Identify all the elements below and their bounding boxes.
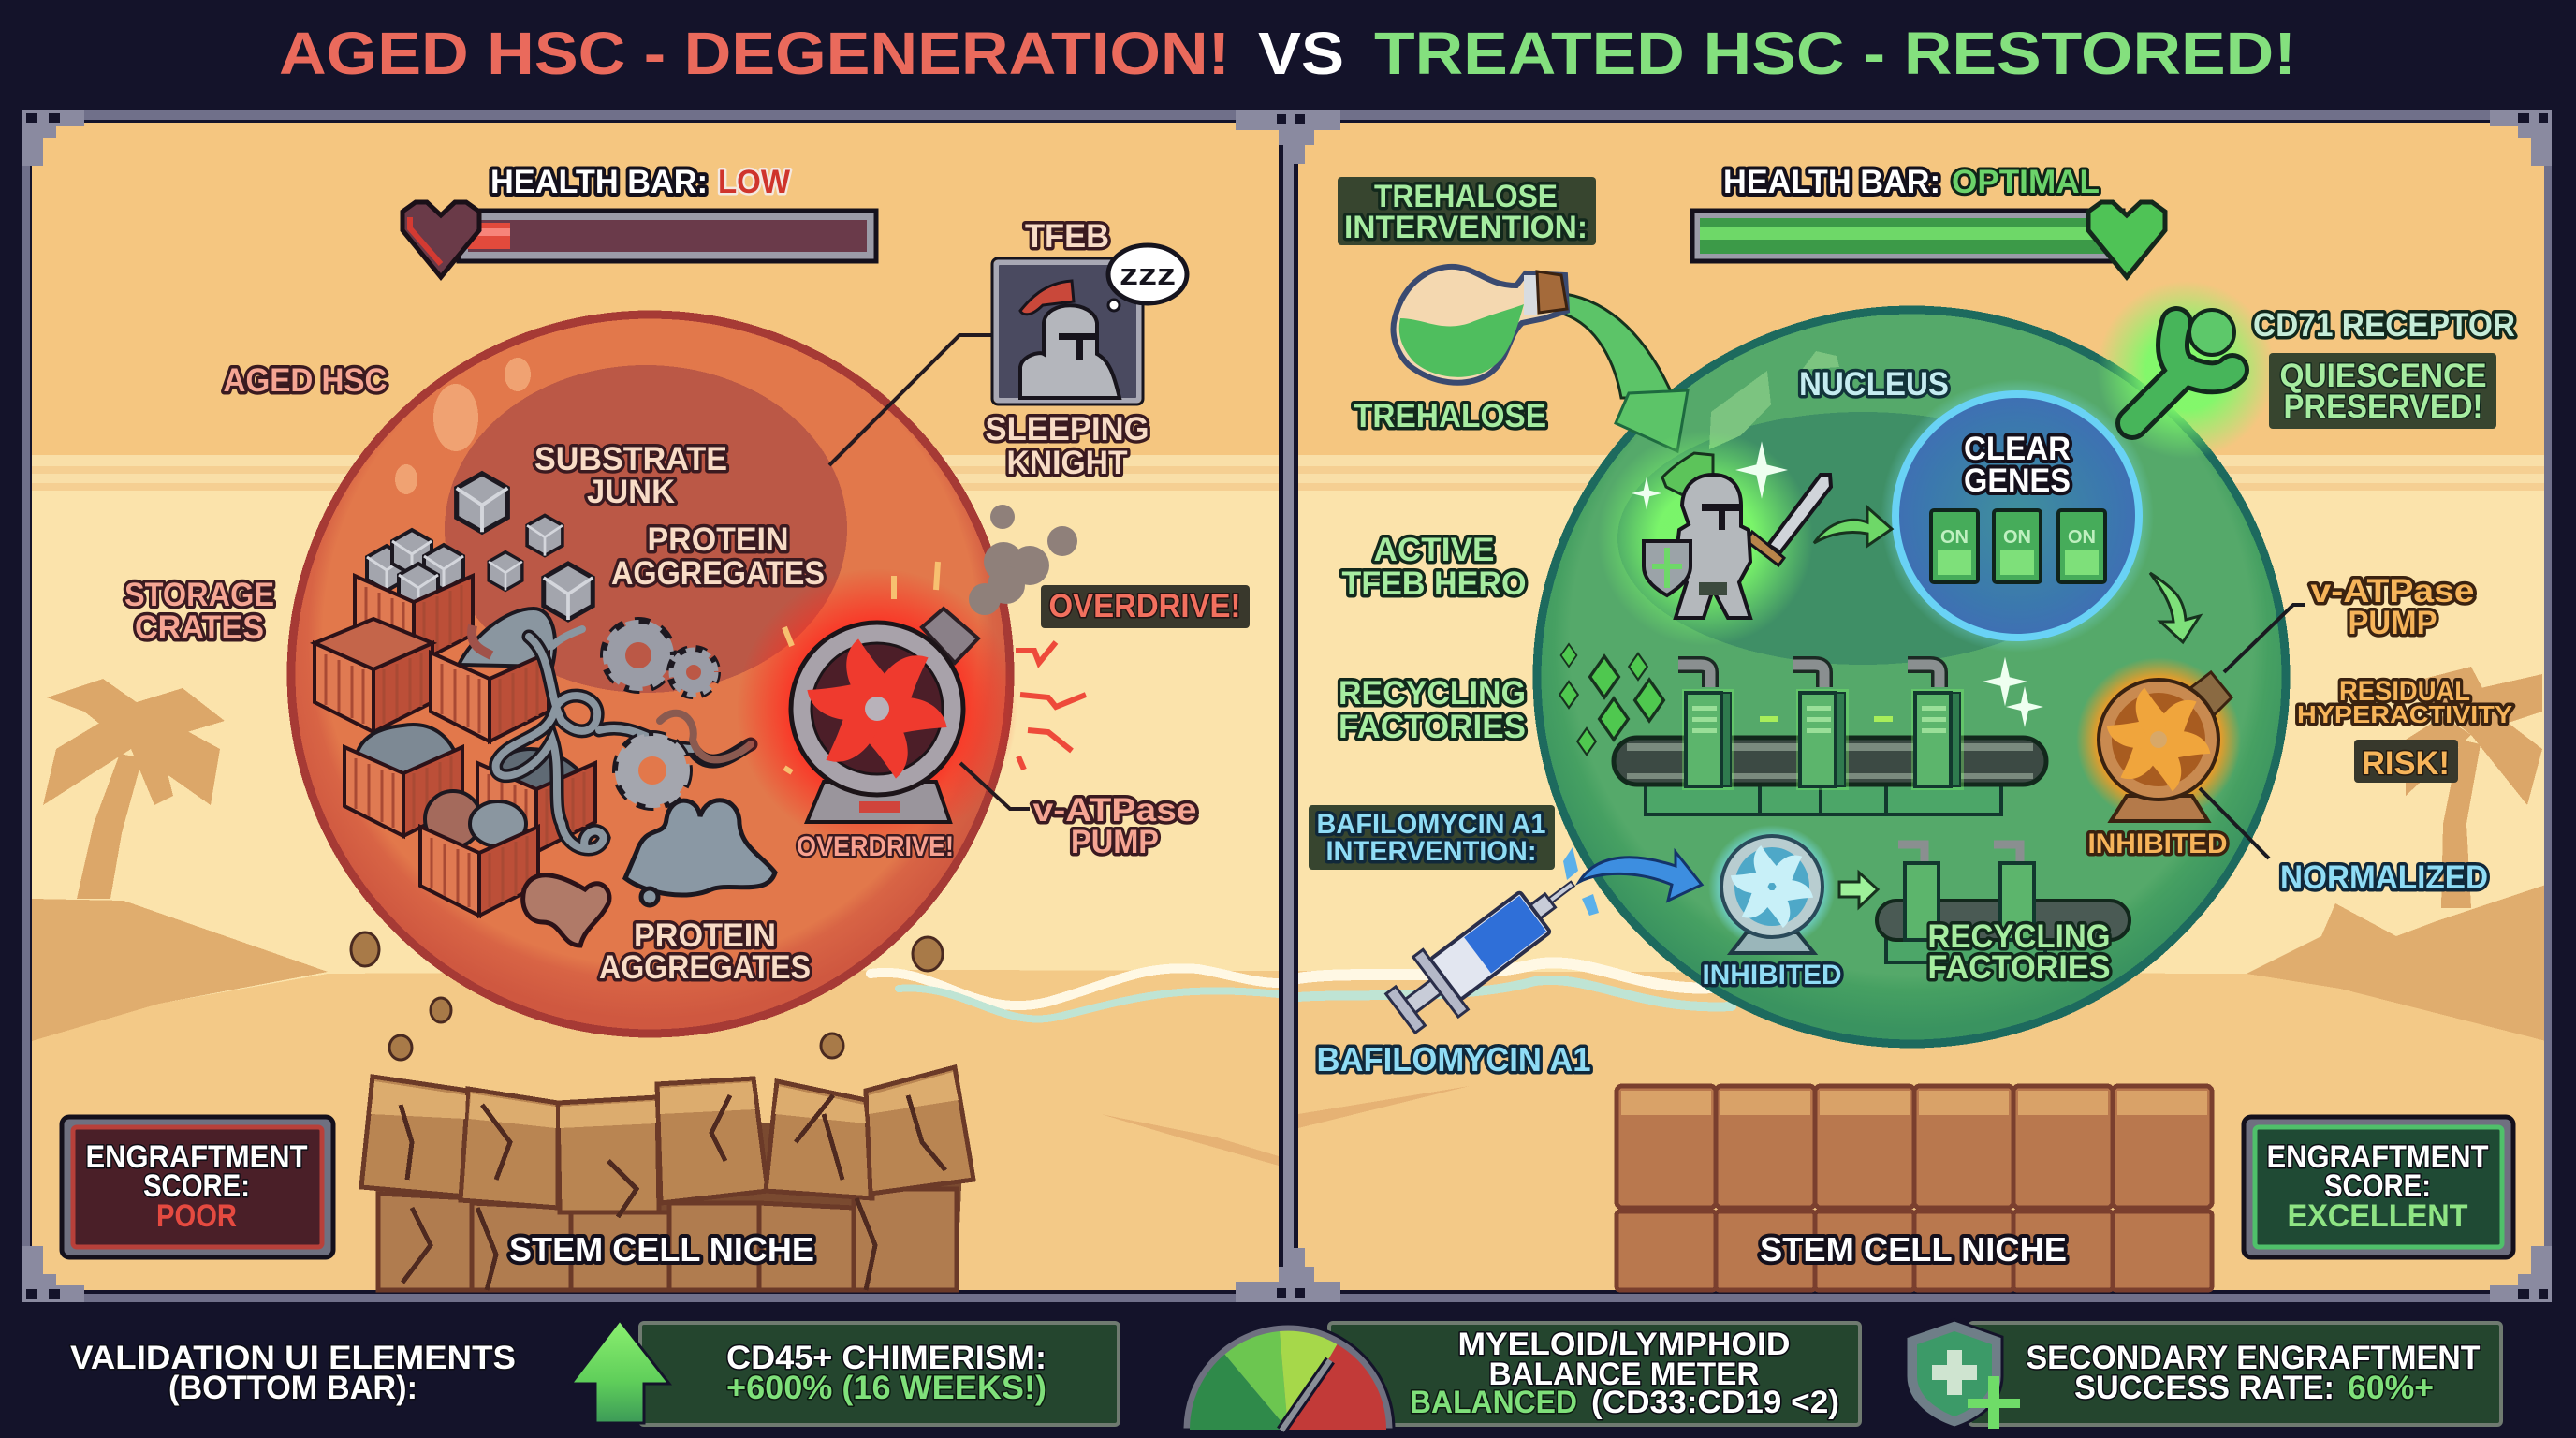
falling debris [351, 932, 943, 1060]
engraftment score poor: POOR [156, 1198, 237, 1234]
on switch 3 [2058, 510, 2105, 582]
recycling factories inner label: FACTORIES [1928, 949, 2110, 986]
trehalose intervention box [1338, 177, 1596, 245]
stem cell niche label: STEM CELL NICHE [509, 1230, 814, 1269]
aged cell body [291, 315, 1010, 1034]
title: VS [1258, 20, 1344, 87]
active TFEB label: ACTIVE [1374, 532, 1494, 568]
gray protein aggregate blob [625, 800, 775, 905]
trehalose intervention box: INTERVENTION: [1344, 210, 1588, 245]
risk callout: RISK! [2362, 745, 2450, 782]
v-ATPase pump inhibited orange [2076, 657, 2241, 822]
blue inhibited pump [1708, 825, 1836, 953]
shield icon [1906, 1320, 2020, 1429]
active TFEB hero knight [1598, 431, 1831, 646]
tangled protein strands [496, 629, 751, 849]
health bar low: HEALTH BAR: [490, 164, 708, 200]
residual hyperactivity label: RESIDUAL [2339, 676, 2470, 707]
health bar low [402, 164, 876, 277]
small arrow to factory [1839, 873, 1878, 907]
balance meter panel: BALANCE METER [1488, 1357, 1760, 1392]
restored cell body [1537, 310, 2286, 1044]
trehalose intervention box: TREHALOSE [1374, 179, 1558, 214]
large recycling factory conveyor [1614, 665, 2046, 814]
blue inhibited label: INHIBITED [1702, 960, 1842, 990]
nucleus with gene switches: GENES [1964, 462, 2071, 499]
sleeping knight card: TFEB [1025, 218, 1109, 255]
secondary engraftment panel: SUCCESS RATE: [2074, 1370, 2334, 1406]
palm tree left [43, 679, 225, 899]
v-ATPase pump overdrive [737, 568, 1017, 849]
pump status label: OVERDRIVE! [797, 831, 954, 862]
nucleus with gene switches: CLEAR [1964, 431, 2071, 467]
health bar optimal: HEALTH BAR: [1723, 164, 1940, 200]
on switch 3: ON [2068, 527, 2096, 548]
sleeping knight card: zzz [1120, 257, 1176, 291]
protein aggregates label upper: PROTEIN [648, 521, 788, 558]
on switch 2: ON [2003, 527, 2031, 548]
pump leader line and label [960, 763, 1196, 860]
bafilomycin label: BAFILOMYCIN A1 [1316, 1040, 1591, 1078]
gears [608, 625, 714, 802]
panel: treated HSC [1309, 164, 2515, 1290]
engraftment score poor [62, 1117, 333, 1257]
sleeping knight card: KNIGHT [1007, 445, 1127, 481]
quiescence preserved callout [2269, 353, 2496, 429]
recycling factories inner label: RECYCLING [1928, 918, 2110, 955]
recycling factories label: FACTORIES [1339, 709, 1526, 745]
nucleus label: NUCLEUS [1799, 366, 1949, 403]
secondary engraftment panel: SECONDARY ENGRAFTMENT [2026, 1340, 2481, 1376]
nucleus with gene switches [1881, 379, 2154, 653]
balance meter panel: MYELOID/LYMPHOID [1458, 1327, 1790, 1362]
pump leader line and label: PUMP [1071, 824, 1159, 860]
bottom validation bar [70, 1320, 2501, 1431]
recycling factories label: RECYCLING [1339, 675, 1526, 712]
sleeping knight card [829, 218, 1187, 481]
residual hyperactivity label: HYPERACTIVITY [2297, 700, 2512, 728]
v-ATPase label right: PUMP [2348, 605, 2437, 641]
normalized label: NORMALIZED [2280, 859, 2488, 896]
storage crates label: CRATES [135, 609, 264, 646]
on switch 1 [1931, 510, 1978, 582]
gray substrate cubes [457, 474, 593, 620]
engraftment score poor: ENGRAFTMENT [86, 1139, 308, 1175]
active TFEB label [1342, 532, 1526, 602]
on switch 1: ON [1940, 527, 1969, 548]
recycling factories label [1339, 675, 1526, 745]
CD71 receptor: CD71 RECEPTOR [2253, 307, 2515, 344]
secondary engraftment panel [1906, 1320, 2501, 1429]
small recycling factory [1877, 844, 2130, 962]
bafilomycin intervention box [1309, 805, 1555, 870]
substrate junk label: JUNK [587, 474, 675, 510]
pump sparks [784, 562, 1086, 772]
cracked stem cell niche [361, 1067, 973, 1290]
blue arrow [1579, 852, 1702, 901]
recycling factories inner label [1928, 918, 2110, 986]
quiescence preserved callout: PRESERVED! [2284, 389, 2482, 425]
substrate junk label: SUBSTRATE [534, 441, 727, 477]
normalized label [2200, 788, 2488, 896]
balance meter panel: BALANCED [1410, 1385, 1577, 1420]
arrow nucleus to pump [2150, 573, 2200, 642]
health bar optimal [1692, 164, 2165, 277]
storage crates label [124, 577, 274, 646]
chimerism panel: CD45+ CHIMERISM: [726, 1340, 1046, 1376]
balance meter panel: (CD33:CD19 <2) [1591, 1385, 1839, 1420]
palm tree right [2406, 667, 2542, 908]
bafilomycin intervention box: BAFILOMYCIN A1 [1316, 809, 1546, 840]
secondary engraftment panel: 60%+ [2348, 1370, 2434, 1406]
stem cell niche label right: STEM CELL NICHE [1760, 1230, 2067, 1269]
pump smoke [969, 505, 1077, 615]
residual hyperactivity label [2297, 676, 2512, 728]
medicine drops [1563, 847, 1599, 916]
chimerism panel [571, 1320, 1119, 1425]
validation heading [70, 1340, 516, 1406]
v-ATPase label right [2224, 573, 2475, 672]
arrow hero to nucleus [1814, 507, 1892, 546]
chimerism panel: +600% (16 WEEKS!) [726, 1370, 1046, 1406]
gauge [1182, 1324, 1394, 1431]
pump leader line and label: v-ATPase [1033, 792, 1196, 829]
panel: aged HSC [62, 164, 1250, 1290]
on switch 2 [1994, 510, 2041, 582]
overdrive callout: OVERDRIVE! [1048, 588, 1241, 624]
storage crates label: STORAGE [124, 577, 274, 613]
protein aggregates label lower: AGGREGATES [599, 949, 811, 986]
CD71 receptor [2097, 281, 2515, 459]
validation heading: VALIDATION UI ELEMENTS [70, 1340, 516, 1376]
sea foam waves [871, 962, 1732, 1019]
healthy stem cell niche [1617, 1086, 2212, 1290]
protein aggregates label upper: AGGREGATES [611, 555, 825, 592]
quiescence preserved callout: QUIESCENCE [2280, 358, 2486, 394]
trehalose potion and stream [1394, 267, 1688, 451]
orange inhibited label: INHIBITED [2087, 829, 2228, 859]
bafilomycin syringe [1378, 854, 1595, 1043]
sleeping knight card: SLEEPING [985, 411, 1149, 448]
protein aggregates label lower [599, 917, 811, 986]
trehalose label: TREHALOSE [1354, 398, 1546, 434]
engraftment score excellent: SCORE: [2324, 1168, 2431, 1204]
crates stacked with contents [315, 530, 595, 916]
engraftment score excellent: ENGRAFTMENT [2267, 1139, 2489, 1175]
health bar low: LOW [718, 164, 790, 200]
bafilomycin intervention box: INTERVENTION: [1325, 836, 1537, 867]
aged HSC label: AGED HSC [223, 362, 388, 399]
balance meter panel [1182, 1323, 1860, 1431]
beach scenery backdrop [32, 122, 2546, 1292]
substrate junk label [534, 441, 727, 510]
title: AGED HSC - DEGENERATION! [279, 20, 1230, 87]
validation heading: (BOTTOM BAR): [168, 1370, 417, 1406]
protein aggregates label upper [611, 521, 825, 592]
active TFEB label: TFEB HERO [1342, 565, 1526, 602]
engraftment score excellent [2244, 1117, 2513, 1257]
engraftment score poor: SCORE: [143, 1168, 250, 1204]
v-ATPase label right: v-ATPase [2310, 573, 2475, 609]
title [279, 20, 2296, 87]
protein aggregates label lower: PROTEIN [634, 917, 776, 954]
sparkles [1559, 644, 2043, 755]
engraftment score excellent: EXCELLENT [2288, 1198, 2468, 1234]
brown lump [523, 875, 609, 946]
title: TREATED HSC - RESTORED! [1374, 20, 2296, 87]
health bar optimal: OPTIMAL [1952, 164, 2100, 200]
